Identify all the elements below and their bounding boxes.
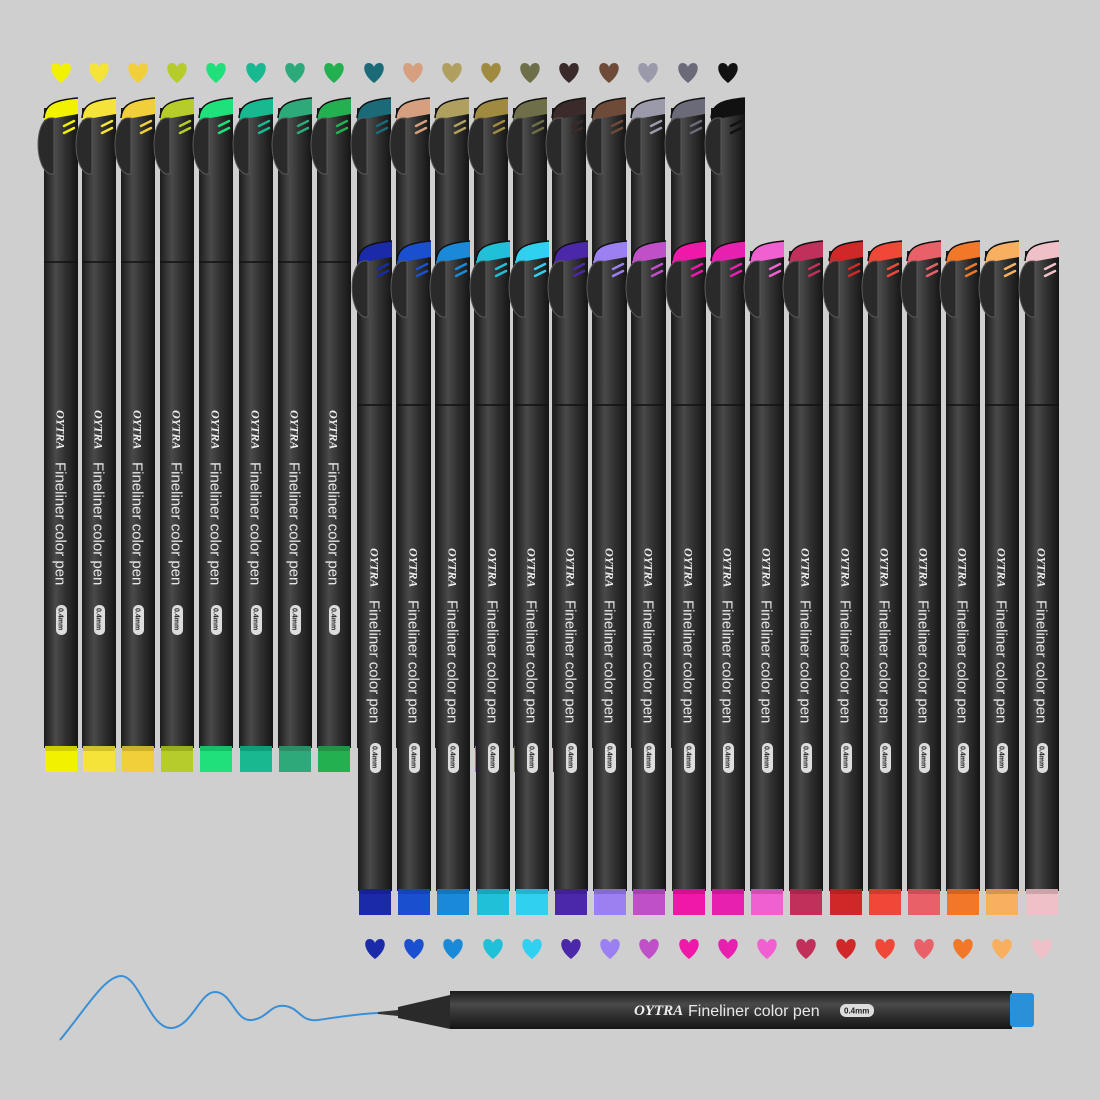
pen f6: OYTRA: [564, 548, 578, 587]
pen f15: [901, 241, 941, 915]
pen 6: Fineliner color pen: [246, 462, 264, 585]
pen f4: Fineliner color pen: [484, 600, 500, 723]
back row pens: [38, 98, 745, 772]
pen 7: [272, 98, 312, 772]
pen 7: Fineliner color pen: [286, 462, 302, 585]
pen 5: Fineliner color pen: [206, 462, 224, 585]
pen f6: [548, 241, 588, 915]
pen 1: OYTRA: [54, 410, 68, 449]
pen f1: [352, 241, 392, 915]
pen 15: [586, 98, 626, 772]
front row pens: [352, 241, 1059, 915]
pen 5: [193, 98, 233, 772]
pen f7: Fineliner color pen: [600, 600, 618, 723]
pen f18: OYTRA: [1034, 548, 1048, 587]
horizontal pen: Fineliner color pen: [688, 1003, 820, 1020]
pen f10: 0.4mm: [724, 746, 730, 768]
hearts: top row: [51, 63, 738, 83]
pen 1: [38, 98, 78, 772]
pen f10: [705, 241, 745, 915]
pen f5: Fineliner color pen: [522, 600, 540, 723]
pen f13: [823, 241, 863, 915]
pen f8: Fineliner color pen: [640, 600, 656, 723]
pen f14: Fineliner color pen: [876, 600, 892, 723]
pen 9: [351, 98, 391, 772]
hearts: bottom row: [365, 939, 1052, 959]
pen 3: 0.4mm: [134, 608, 140, 630]
pen f18: Fineliner color pen: [1032, 600, 1050, 723]
pen f18: 0.4mm: [1038, 746, 1044, 768]
pen 1: Fineliner color pen: [52, 462, 68, 585]
pen 17: [665, 98, 705, 772]
pen 8: [311, 98, 351, 772]
pen f2: Fineliner color pen: [404, 600, 422, 723]
pen f15: OYTRA: [916, 548, 930, 587]
pen f5: [509, 241, 549, 915]
pen f8: 0.4mm: [644, 746, 652, 768]
pen 2: [76, 98, 116, 772]
pen f17: OYTRA: [994, 548, 1008, 587]
pen f4: OYTRA: [486, 548, 500, 587]
pen 2: OYTRA: [92, 410, 106, 449]
pen 16: [625, 98, 665, 772]
pen f18: [1019, 241, 1059, 915]
horizontal pen: 0.4mm: [844, 1006, 869, 1016]
pen 8: Fineliner color pen: [324, 462, 342, 585]
pen f8: OYTRA: [642, 548, 656, 587]
pen f8: [626, 241, 666, 915]
pen f7: 0.4mm: [606, 746, 612, 768]
pen f9: [666, 241, 706, 915]
pen f12: Fineliner color pen: [796, 600, 814, 723]
pen f4: [470, 241, 510, 915]
pen f10: Fineliner color pen: [718, 600, 736, 723]
pen f17: Fineliner color pen: [992, 600, 1010, 723]
pen f1: Fineliner color pen: [366, 600, 382, 723]
pen f3: OYTRA: [446, 548, 460, 587]
pen 13: [507, 98, 547, 772]
pen f2: [391, 241, 431, 915]
pen f11: OYTRA: [760, 548, 774, 587]
squiggle line: [60, 976, 378, 1040]
pen f14: 0.4mm: [880, 746, 888, 768]
pen f6: Fineliner color pen: [562, 600, 578, 723]
pen 5: 0.4mm: [212, 608, 218, 630]
pen f12: [783, 241, 823, 915]
pen 4: [154, 98, 194, 772]
pen 12: [468, 98, 508, 772]
pen f12: 0.4mm: [802, 746, 808, 768]
pen f16: OYTRA: [956, 548, 970, 587]
pen f15: 0.4mm: [920, 746, 926, 768]
pen f5: 0.4mm: [528, 746, 534, 768]
pen f3: [430, 241, 470, 915]
pen 10: [390, 98, 430, 772]
pen f11: [744, 241, 784, 915]
pen 11: [429, 98, 469, 772]
pen 14: [546, 98, 586, 772]
pen f14: OYTRA: [878, 548, 892, 587]
pen f5: OYTRA: [524, 548, 538, 587]
horizontal pen: [378, 991, 1034, 1029]
pen f4: 0.4mm: [488, 746, 496, 768]
pen f9: OYTRA: [682, 548, 696, 587]
pen f17: 0.4mm: [998, 746, 1004, 768]
pen f13: OYTRA: [838, 548, 852, 587]
pen f2: OYTRA: [406, 548, 420, 587]
pen 7: OYTRA: [288, 410, 302, 449]
pen 18: [705, 98, 745, 772]
pen f11: Fineliner color pen: [758, 600, 774, 723]
pen f13: 0.4mm: [842, 746, 848, 768]
pen f11: 0.4mm: [762, 746, 770, 768]
pen f15: Fineliner color pen: [914, 600, 932, 723]
pen 4: Fineliner color pen: [168, 462, 184, 585]
pen f10: OYTRA: [720, 548, 734, 587]
pen f3: 0.4mm: [448, 746, 456, 768]
pen 2: Fineliner color pen: [90, 462, 106, 585]
pen f7: OYTRA: [602, 548, 616, 587]
pen f14: [862, 241, 902, 915]
pen 2: 0.4mm: [94, 608, 102, 630]
pen f3: Fineliner color pen: [444, 600, 460, 723]
pen 6: OYTRA: [248, 410, 262, 449]
pen f17: [979, 241, 1019, 915]
pen f16: [940, 241, 980, 915]
pen 8: OYTRA: [326, 410, 340, 449]
pen 1: 0.4mm: [56, 608, 64, 630]
pen f13: Fineliner color pen: [836, 600, 854, 723]
pen f7: [587, 241, 627, 915]
pen f2: 0.4mm: [410, 746, 416, 768]
pen 5: OYTRA: [208, 410, 222, 449]
pen f9: Fineliner color pen: [680, 600, 696, 723]
pen f1: 0.4mm: [370, 746, 378, 768]
pen f16: 0.4mm: [958, 746, 966, 768]
pen f16: Fineliner color pen: [954, 600, 970, 723]
pen 6: [233, 98, 273, 772]
pen 4: 0.4mm: [172, 608, 180, 630]
pen 3: Fineliner color pen: [128, 462, 146, 585]
pen 4: OYTRA: [170, 410, 184, 449]
pen f1: OYTRA: [368, 548, 382, 587]
horizontal pen: OYTRA: [634, 1003, 683, 1019]
pen 6: 0.4mm: [252, 608, 258, 630]
pen f6: 0.4mm: [566, 746, 574, 768]
pen 3: OYTRA: [130, 410, 144, 449]
pen 3: [115, 98, 155, 772]
pen 7: 0.4mm: [290, 608, 298, 630]
pen f12: OYTRA: [798, 548, 812, 587]
pen f9: 0.4mm: [684, 746, 692, 768]
pen 8: 0.4mm: [330, 608, 336, 630]
